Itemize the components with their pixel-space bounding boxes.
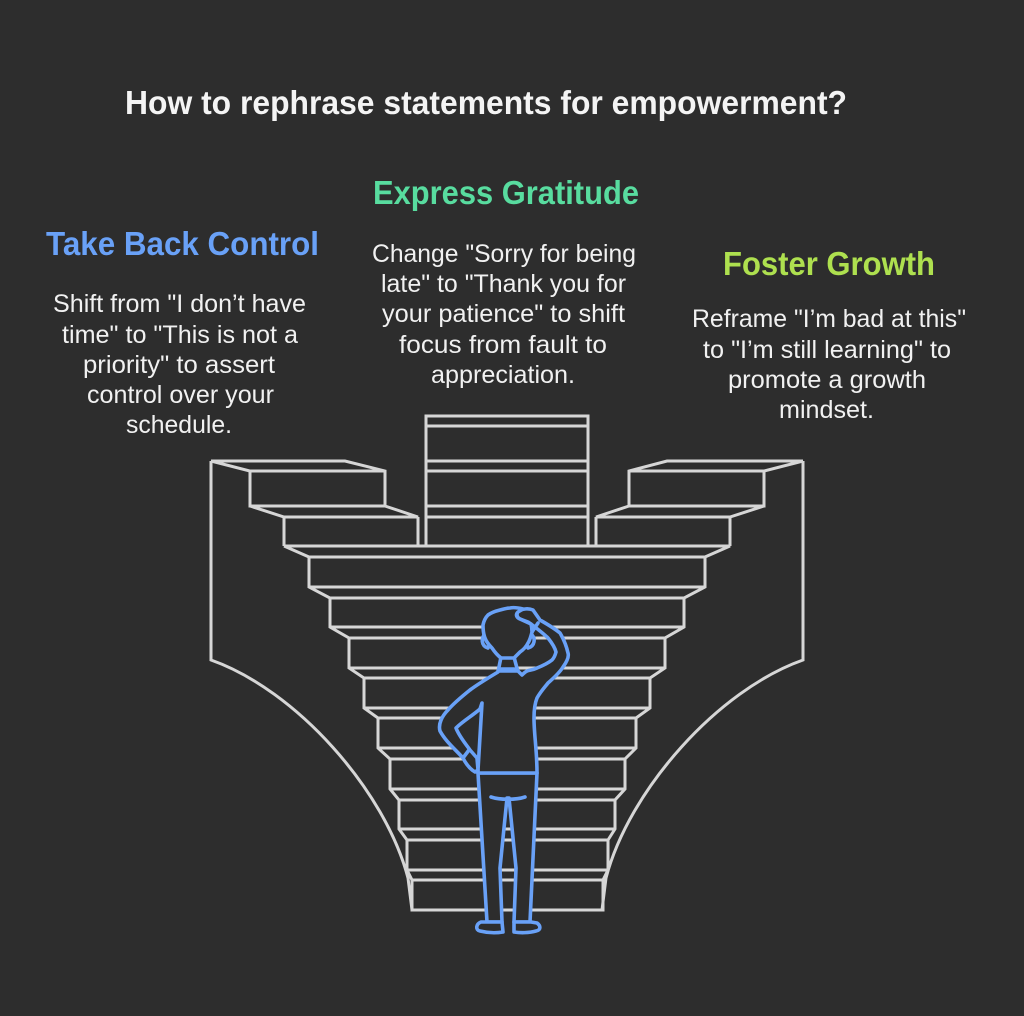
- legs: [478, 773, 537, 922]
- panel: foster growth: [692, 245, 966, 424]
- right wall: [602, 461, 803, 910]
- text block: take back control: time" to "This is not a: [62, 321, 298, 349]
- person looking at stairs: [439, 608, 568, 933]
- text block: foster growth: promote a growth: [728, 366, 926, 394]
- text block: express gratitude: appreciation.: [431, 361, 575, 389]
- panel: express gratitude: [372, 174, 639, 389]
- neck: [498, 657, 518, 672]
- text block: take back control: Shift from "I don’t have: [53, 290, 306, 318]
- upper left steps: [211, 461, 418, 546]
- text block: take back control: control over your: [87, 381, 274, 409]
- text block: take back control: schedule.: [126, 411, 232, 439]
- central column: [426, 416, 588, 546]
- text block: express gratitude: [372, 240, 636, 389]
- text block: take back control: priority" to assert: [83, 351, 275, 379]
- title: How to rephrase statements for empowerment?: [125, 84, 847, 121]
- text block: foster growth: mindset.: [779, 396, 874, 424]
- heading: take back control: Take Back Control: [46, 225, 319, 262]
- ears: [482, 634, 491, 648]
- torso and arms: [439, 609, 568, 773]
- heading: express gratitude: Express Gratitude: [373, 174, 639, 211]
- text block: foster growth: Reframe "I’m bad at this": [692, 305, 966, 333]
- head: [483, 608, 532, 658]
- text block: express gratitude: focus from fault to: [399, 331, 607, 359]
- panel: take back control: [46, 225, 319, 439]
- text block: foster growth: to "I’m still learning" to: [703, 336, 951, 364]
- left wall: [211, 461, 412, 910]
- feet: [477, 922, 503, 933]
- text block: express gratitude: Change "Sorry for being: [372, 240, 636, 268]
- arm opening: [456, 703, 482, 770]
- main stair flight: [284, 546, 730, 910]
- upper right steps: [596, 461, 803, 546]
- staircase illustration: [211, 416, 803, 910]
- heading: foster growth: Foster Growth: [723, 245, 935, 282]
- text block: express gratitude: your patience" to shift: [382, 300, 625, 328]
- text block: take back control: [53, 290, 306, 439]
- text block: express gratitude: late" to "Thank you for: [381, 270, 626, 298]
- text block: foster growth: [692, 305, 966, 424]
